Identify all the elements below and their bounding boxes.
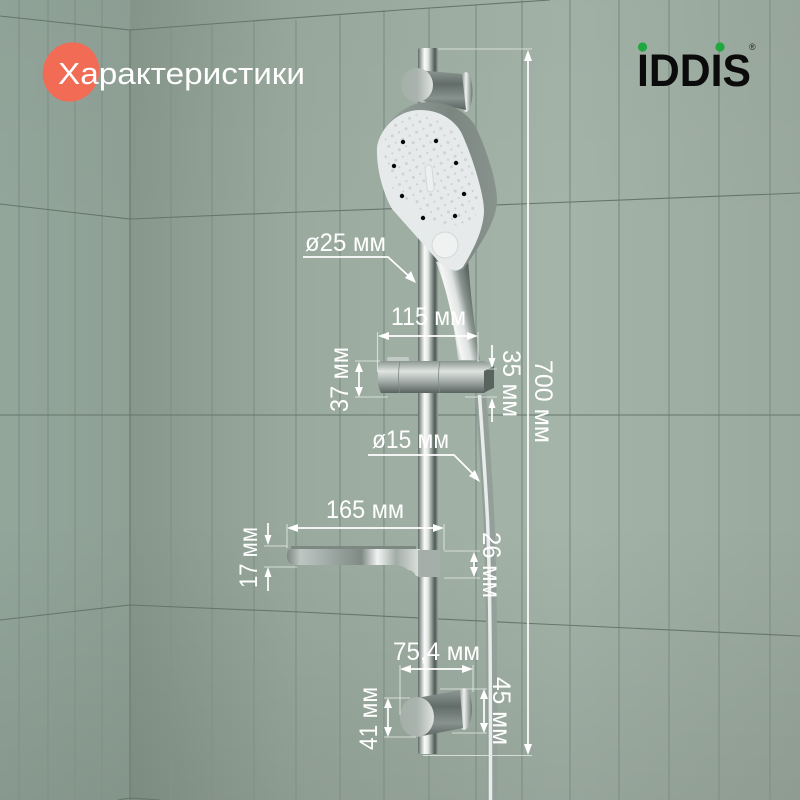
dimension: rail diameter 25 mm [303, 229, 416, 283]
head button [432, 232, 458, 258]
soap dish [287, 546, 440, 577]
shower handle [436, 258, 480, 360]
dimension: clamp height 37 mm [326, 347, 388, 412]
head back shell [377, 102, 497, 270]
dimension: clamp depth 35 mm [465, 345, 525, 422]
dimension: bracket width 75.4 mm: 75,4 мм [393, 638, 480, 666]
slide rail [418, 48, 438, 754]
dimension: hose diameter 15 mm: ø15 мм [372, 426, 449, 454]
dimension: hose diameter 15 mm [368, 426, 480, 482]
dimension: soap dish height 17 mm [235, 523, 297, 591]
dimension: holder width 115 mm: 115 мм [391, 303, 466, 331]
logo: IDDIS: IDDIS [637, 45, 751, 96]
dimension: soap dish height 17 mm: 17 мм [235, 527, 263, 588]
dimension: holder width 115 mm [378, 303, 478, 372]
dimension: bracket height 41 mm: 41 мм [355, 687, 383, 750]
shower head [370, 102, 497, 271]
shower hose highlight [480, 395, 490, 800]
dimension: flange height 45 mm: 45 мм [487, 677, 515, 745]
top wall bracket [401, 68, 472, 112]
shower hose [481, 395, 492, 800]
dimension: slider height 26 mm [444, 532, 505, 598]
dimension: clamp height 37 mm: 37 мм [326, 347, 354, 412]
logo: IDDIS: ® [749, 42, 756, 52]
dimension: bracket width 75.4 mm [393, 638, 480, 715]
dimension: slider height 26 mm: 26 мм [477, 532, 505, 598]
title: Характеристики [58, 56, 305, 91]
bottom wall bracket [400, 688, 472, 737]
dimension: soap dish width 165 mm [287, 496, 444, 550]
dimension: bracket height 41 mm [355, 687, 416, 750]
dimension: rail diameter 25 mm: ø25 мм [305, 229, 386, 257]
dimension: soap dish width 165 mm: 165 мм [326, 496, 404, 524]
head black nozzles [392, 139, 466, 220]
title badge blob [33, 33, 109, 111]
head centre slot [425, 165, 434, 192]
dimension: total height 700 mm [423, 49, 557, 756]
head white face [377, 110, 484, 271]
dimension: flange height 45 mm [440, 677, 515, 745]
dimension: total height 700 mm: 700 мм [529, 360, 557, 443]
dimension: clamp depth 35 mm: 35 мм [497, 350, 525, 417]
holder clamp [378, 357, 494, 393]
head nozzle dots [384, 114, 479, 226]
